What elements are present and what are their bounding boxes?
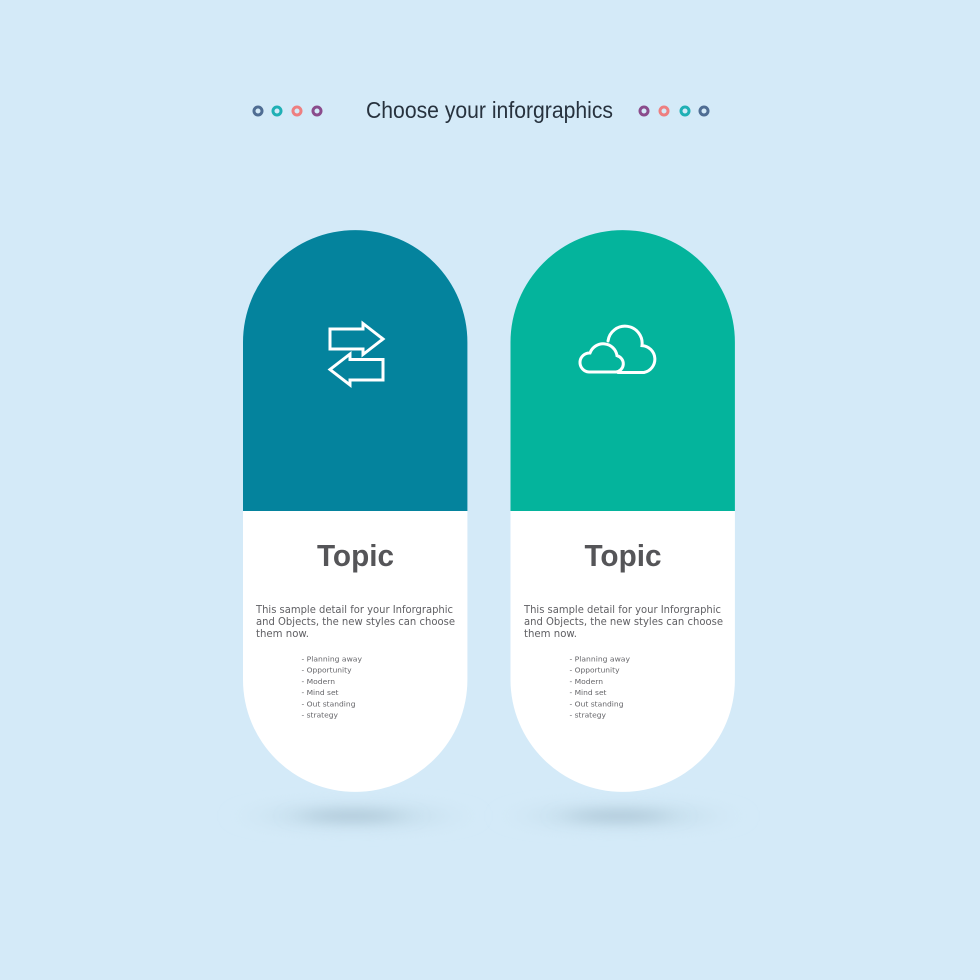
list: right bullet items: - Modern <box>570 677 603 686</box>
list: left bullet items: - Opportunity <box>302 666 352 674</box>
capsule bottom: white <box>243 511 467 792</box>
list: right bullet items: - Mind set <box>570 688 607 697</box>
list: left bullet items: - Planning away <box>302 654 363 664</box>
icon: exchange arrows <box>330 324 383 385</box>
capsule top: teal <box>243 230 467 511</box>
text block: left description: This sample detail for your Inforgraphic <box>255 605 453 616</box>
list: right bullet items: - Out standing <box>570 700 624 708</box>
list: left bullet items: - strategy <box>302 710 339 720</box>
text block: right description <box>523 605 723 640</box>
text block: right description: This sample detail for your Inforgraphic <box>523 605 721 616</box>
list: left bullet items: - Mind set <box>302 688 339 697</box>
text block: right description: them now. <box>524 629 577 640</box>
capsule bottom: white <box>510 511 735 792</box>
heading: right topic: Topic <box>584 538 662 573</box>
title: Choose your inforgraphics <box>366 97 613 123</box>
text block: left description <box>255 605 455 640</box>
heading: left topic: Topic <box>317 538 394 573</box>
text block: left description: them now. <box>256 629 309 640</box>
right decorative dots <box>640 107 708 115</box>
left capsule shadow <box>260 804 450 828</box>
text block: left description: and Objects, the new styles can choose <box>256 617 455 628</box>
list: right bullet items: - Opportunity <box>570 666 620 674</box>
list: right bullet items: - Planning away <box>570 654 631 664</box>
left decorative dots <box>254 107 321 115</box>
capsule top: green <box>510 230 735 511</box>
text block: right description: and Objects, the new styles can choose <box>524 617 723 628</box>
right capsule shadow <box>527 804 717 828</box>
list: right bullet items: - strategy <box>570 710 607 720</box>
icon: clouds <box>580 326 655 372</box>
panel: right capsule <box>510 230 735 792</box>
list: left bullet items: - Out standing <box>302 700 356 708</box>
panel: left capsule <box>243 230 467 792</box>
list: right bullet items <box>570 654 631 720</box>
list: left bullet items <box>302 654 363 720</box>
list: left bullet items: - Modern <box>302 677 335 686</box>
